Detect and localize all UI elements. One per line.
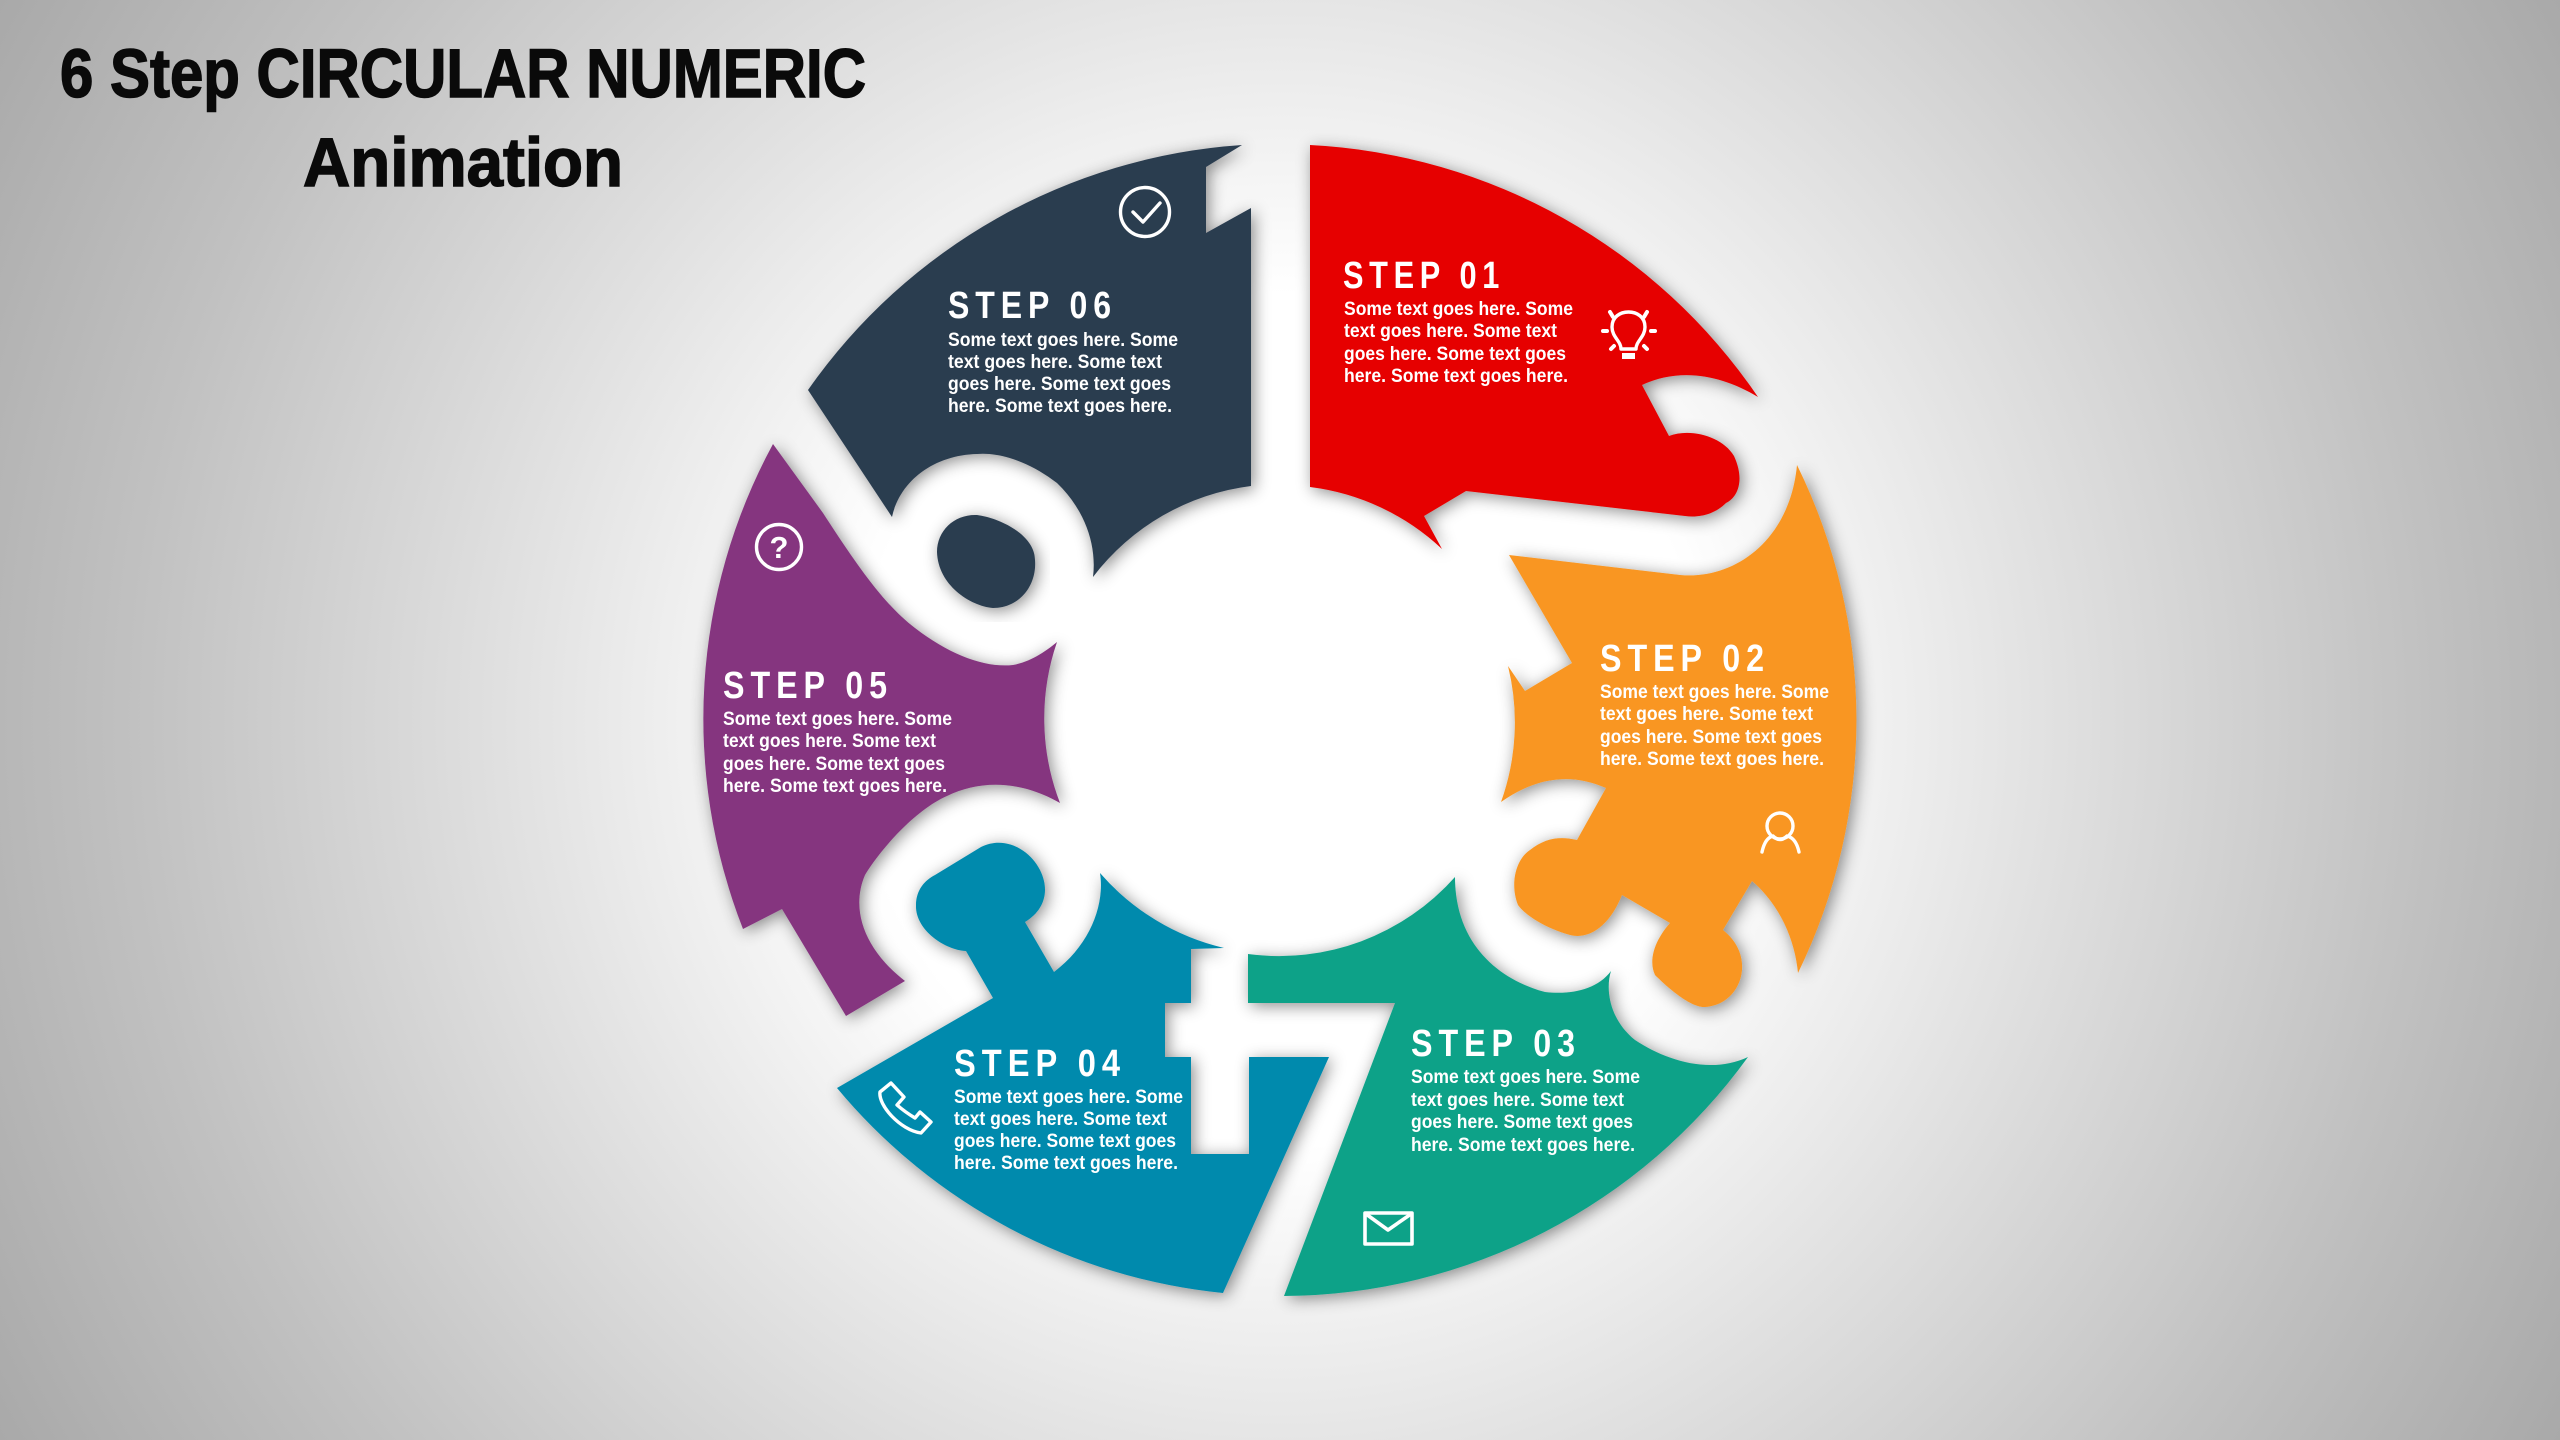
navy puzzle segment xyxy=(808,145,1251,577)
icon: question mark: ? xyxy=(770,530,788,565)
panel: step 06 xyxy=(808,145,1251,608)
panel: step 03 xyxy=(1248,877,1748,1296)
green puzzle segment xyxy=(1248,877,1748,1296)
text block: step 06: goes here. Some text goes xyxy=(948,374,1171,395)
text block: step 06 xyxy=(948,330,1178,417)
purple puzzle segment xyxy=(703,444,1060,1016)
icon: light bulb xyxy=(1603,312,1655,356)
text block: step 03: goes here. Some text goes xyxy=(1411,1112,1633,1133)
text block: step 03: text goes here. Some text xyxy=(1411,1090,1625,1111)
text block: step 05: text goes here. Some text xyxy=(723,731,937,752)
panel: step 05 xyxy=(703,444,1060,1016)
text block: step 04: goes here. Some text goes xyxy=(954,1131,1176,1152)
text block: step 02: text goes here. Some text xyxy=(1600,704,1814,725)
text block: step 01: here. Some text goes here. xyxy=(1344,366,1568,387)
text block: step 03 xyxy=(1411,1067,1640,1156)
text block: step 05: here. Some text goes here. xyxy=(723,776,947,797)
text block: step 04: here. Some text goes here. xyxy=(954,1153,1178,1174)
text block: step 01: Some text goes here. Some xyxy=(1344,299,1573,320)
text block: step 06: Some text goes here. Some xyxy=(948,330,1178,351)
text block: step 03: here. Some text goes here. xyxy=(1411,1135,1635,1156)
icon: person xyxy=(1762,813,1799,852)
orange puzzle segment xyxy=(1501,465,1856,1007)
panel: step 04 xyxy=(837,843,1329,1293)
heading: step 03: STEP 03 xyxy=(1411,1023,1581,1065)
text block: step 02: Some text goes here. Some xyxy=(1600,682,1829,703)
text block: step 01 xyxy=(1344,299,1573,387)
text block: step 04: Some text goes here. Some xyxy=(954,1087,1183,1108)
icon: question mark xyxy=(756,524,802,570)
text block: step 02: here. Some text goes here. xyxy=(1600,749,1824,770)
heading: step 01: STEP 01 xyxy=(1343,255,1505,297)
text block: step 06: text goes here. Some text xyxy=(948,352,1163,373)
text block: step 04 xyxy=(954,1087,1183,1174)
text block: step 01: text goes here. Some text xyxy=(1344,321,1558,342)
text block: step 02 xyxy=(1600,682,1829,770)
text block: step 05: Some text goes here. Some xyxy=(723,709,952,730)
icon: check mark xyxy=(1120,188,1170,236)
heading: step 04: STEP 04 xyxy=(954,1043,1126,1085)
navy puzzle knob xyxy=(937,515,1035,608)
heading: step 02: STEP 02 xyxy=(1600,638,1770,680)
text block: step 03: Some text goes here. Some xyxy=(1411,1067,1640,1088)
blue puzzle segment xyxy=(837,843,1329,1293)
text block: step 05: goes here. Some text goes xyxy=(723,754,945,775)
text block: step 05 xyxy=(723,709,952,797)
title: Animation xyxy=(303,124,623,201)
text block: step 06: here. Some text goes here. xyxy=(948,396,1172,417)
title xyxy=(60,35,866,201)
panel: step 02 xyxy=(1501,465,1856,1007)
text block: step 01: goes here. Some text goes xyxy=(1344,344,1566,365)
icon: phone xyxy=(880,1083,931,1133)
heading: step 06: STEP 06 xyxy=(948,285,1117,327)
panel: step 01 xyxy=(1310,145,1758,549)
text block: step 02: goes here. Some text goes xyxy=(1600,727,1822,748)
red puzzle segment xyxy=(1310,145,1758,549)
icon: envelope xyxy=(1365,1213,1412,1244)
title: 6 Step CIRCULAR NUMERIC xyxy=(60,35,866,112)
heading: step 05: STEP 05 xyxy=(723,665,893,707)
text block: step 04: text goes here. Some text xyxy=(954,1109,1168,1130)
